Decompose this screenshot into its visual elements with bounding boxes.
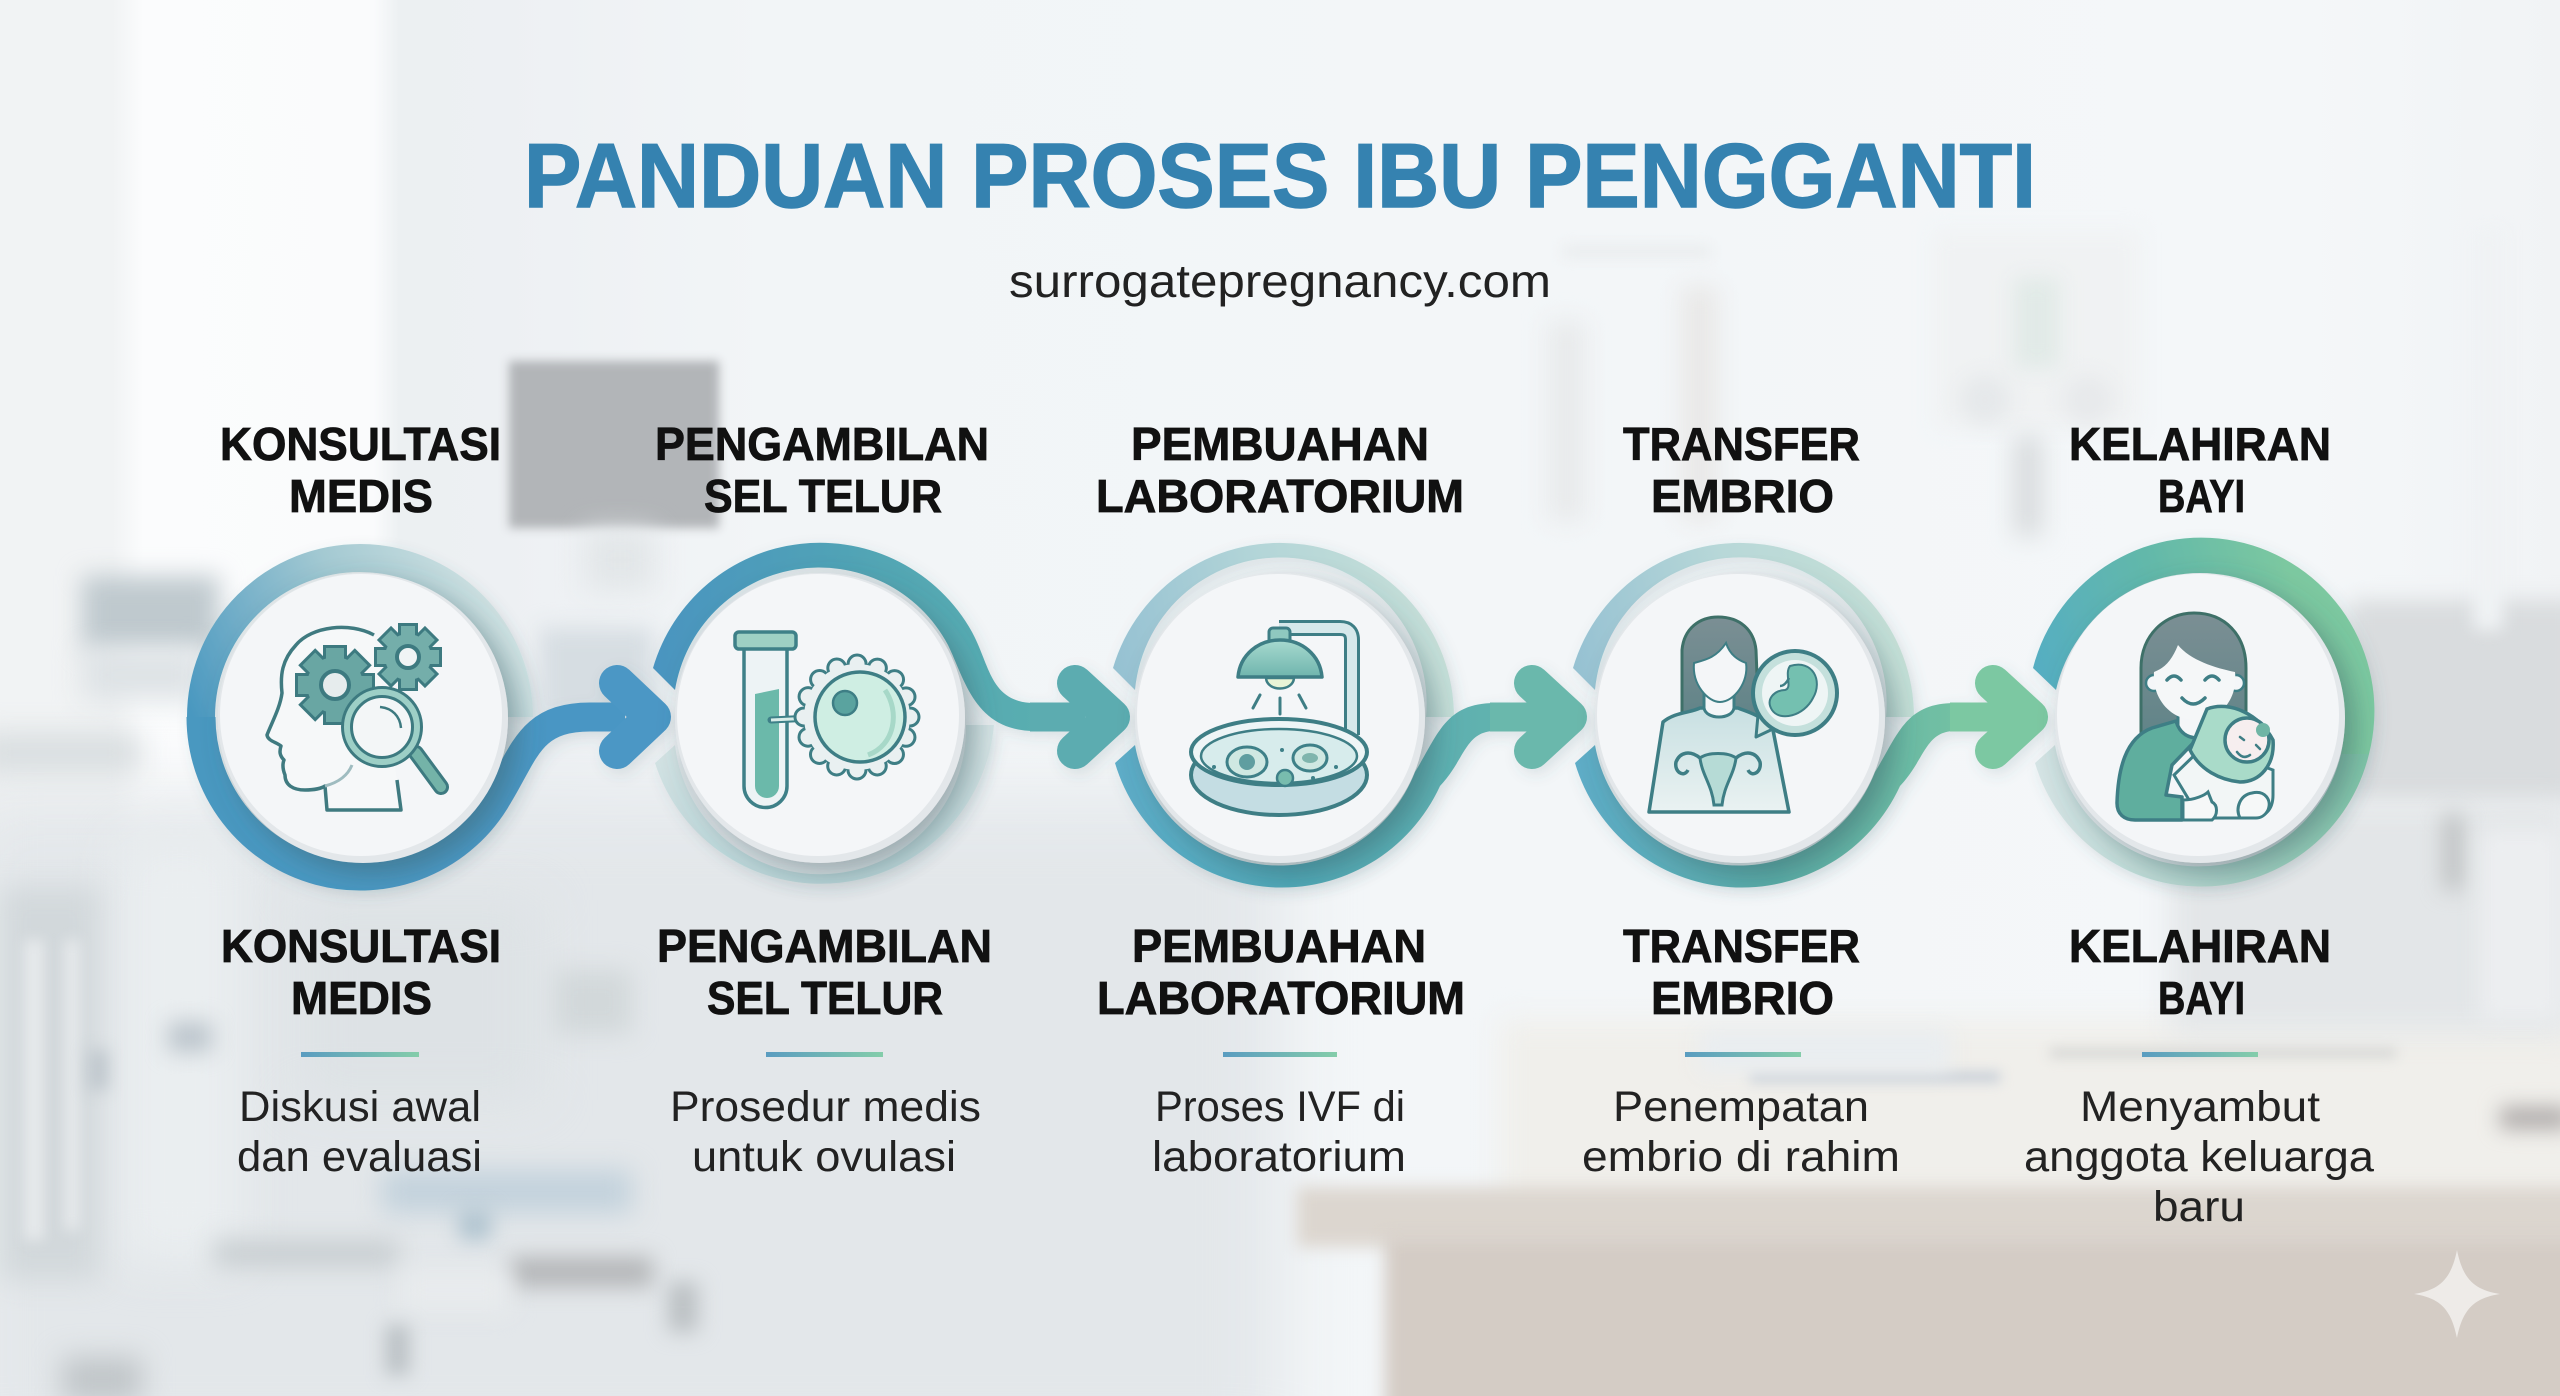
heading top: PENGAMBILAN xyxy=(655,418,989,470)
ring and arrow xyxy=(201,558,653,876)
description: embrio di rahim xyxy=(1582,1133,1900,1181)
heading top xyxy=(220,418,501,522)
description xyxy=(1152,1083,1406,1181)
heading bottom xyxy=(2069,920,2331,1024)
heading top: MEDIS xyxy=(289,470,433,522)
heading bottom: KONSULTASI xyxy=(221,920,501,972)
heading top: KONSULTASI xyxy=(220,418,501,470)
icon: head with gears and magnifier xyxy=(267,626,441,810)
divider xyxy=(2142,1052,2258,1057)
circle xyxy=(2055,573,2345,863)
circle xyxy=(1595,573,1885,863)
description: laboratorium xyxy=(1152,1133,1406,1181)
heading bottom xyxy=(1623,920,1860,1024)
icon: woman with embryo bubble xyxy=(1649,617,1837,812)
heading bottom: TRANSFER xyxy=(1623,920,1860,972)
ring and arrow xyxy=(653,543,1112,884)
divider xyxy=(766,1052,883,1057)
heading top: PEMBUAHAN xyxy=(1131,418,1429,470)
description xyxy=(670,1083,981,1181)
heading bottom: KELAHIRAN xyxy=(2069,920,2331,972)
heading bottom xyxy=(221,920,501,1024)
description: Prosedur medis xyxy=(670,1083,981,1131)
heading bottom: EMBRIO xyxy=(1651,972,1834,1024)
ring and arrow xyxy=(1573,543,2030,888)
heading top: EMBRIO xyxy=(1651,470,1834,522)
step 5: kelahiran bayi xyxy=(2024,418,2374,1231)
divider xyxy=(301,1052,419,1057)
heading bottom: MEDIS xyxy=(291,972,432,1024)
description xyxy=(1582,1083,1900,1181)
step 3: pembuahan laboratorium xyxy=(1096,418,1569,1181)
heading top xyxy=(1623,418,1860,522)
title: PANDUAN PROSES IBU PENGGANTI xyxy=(524,126,2036,227)
heading bottom: LABORATORIUM xyxy=(1097,972,1465,1024)
icon: petri dish under lamp xyxy=(1191,628,1367,815)
heading top: BAYI xyxy=(2158,470,2245,522)
divider xyxy=(1685,1052,1801,1057)
ring xyxy=(2033,538,2374,887)
circle xyxy=(218,573,508,863)
description: Menyambut xyxy=(2080,1083,2320,1131)
heading top xyxy=(2069,418,2331,522)
description xyxy=(2024,1083,2374,1231)
icon: test tube and egg xyxy=(735,632,910,808)
divider xyxy=(1223,1052,1337,1057)
description xyxy=(237,1083,482,1181)
circle xyxy=(675,573,965,863)
description: untuk ovulasi xyxy=(692,1133,956,1181)
step 4: transfer embrio xyxy=(1573,418,2030,1181)
heading top xyxy=(1096,418,1464,522)
heading top: LABORATORIUM xyxy=(1096,470,1464,522)
step 1: konsultasi medis xyxy=(201,418,653,1181)
heading top xyxy=(655,418,989,522)
step 2: pengambilan sel telur xyxy=(653,418,1112,1181)
heading bottom xyxy=(1097,920,1465,1024)
icon: sparkle watermark xyxy=(2414,1250,2500,1338)
description: baru xyxy=(2153,1183,2245,1231)
heading top: TRANSFER xyxy=(1623,418,1860,470)
description: Penempatan xyxy=(1613,1083,1869,1131)
heading bottom: PENGAMBILAN xyxy=(657,920,992,972)
circle xyxy=(1135,573,1425,863)
heading bottom: SEL TELUR xyxy=(707,972,943,1024)
description: anggota keluarga xyxy=(2024,1133,2374,1181)
heading bottom: PEMBUAHAN xyxy=(1132,920,1426,972)
ring and arrow xyxy=(1113,543,1569,888)
description: Diskusi awal xyxy=(239,1083,481,1131)
heading top: KELAHIRAN xyxy=(2069,418,2331,470)
heading top: SEL TELUR xyxy=(704,470,942,522)
description: Proses IVF di xyxy=(1155,1083,1405,1131)
icon: mother holding baby xyxy=(2117,613,2273,820)
heading bottom xyxy=(657,920,992,1024)
description: dan evaluasi xyxy=(237,1133,482,1181)
heading bottom: BAYI xyxy=(2158,972,2245,1024)
subtitle: surrogatepregnancy.com xyxy=(1009,255,1551,307)
